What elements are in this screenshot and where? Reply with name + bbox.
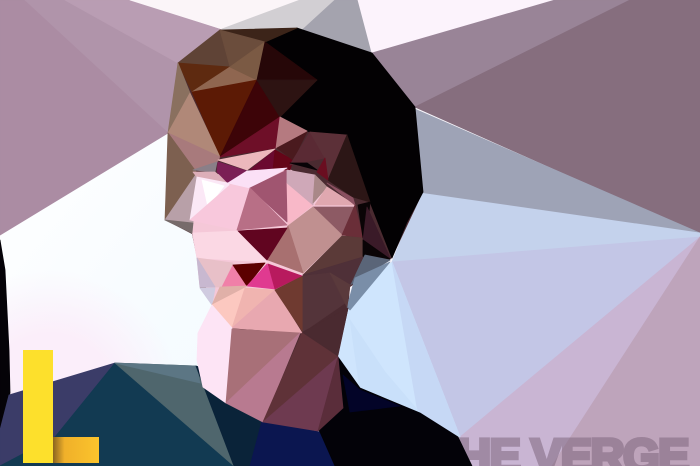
jacket and shirt: [0, 350, 472, 466]
cheeks and nose: [190, 168, 390, 275]
chin and jaw: [200, 273, 350, 355]
neck shadow: [303, 255, 390, 310]
head base silhouette: [165, 28, 423, 431]
brow and eyes: [217, 117, 370, 202]
hair: [168, 28, 423, 258]
logo: yellow L: [23, 350, 99, 463]
mouth: [197, 258, 302, 289]
face: [165, 117, 390, 355]
neck: [197, 305, 343, 431]
